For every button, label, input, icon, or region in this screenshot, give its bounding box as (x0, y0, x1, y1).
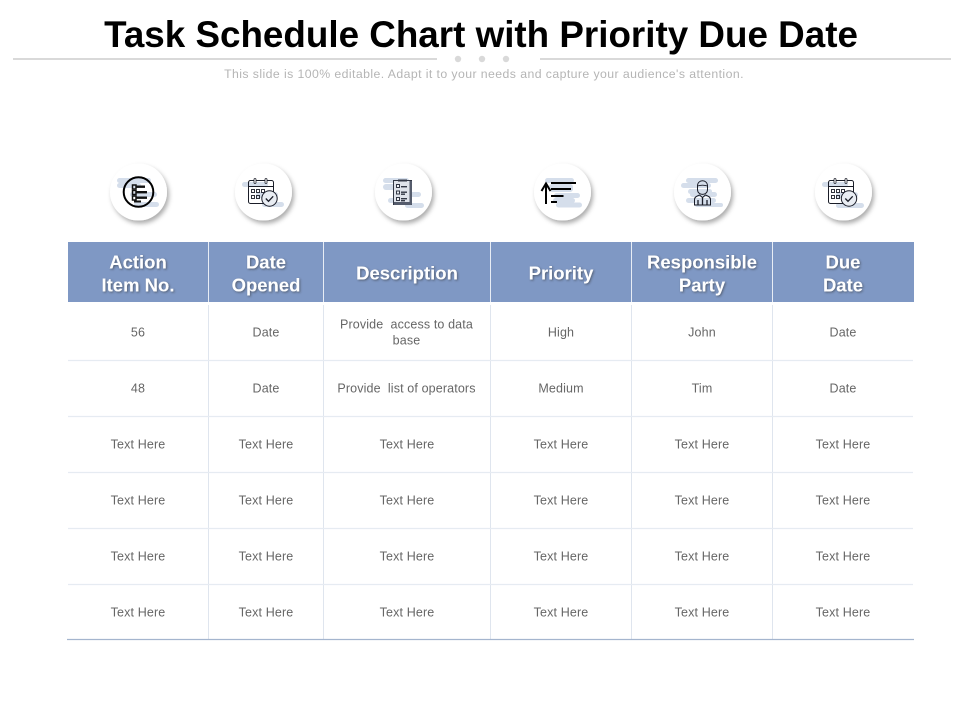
icon: checklist clipboard (description) (375, 164, 432, 220)
row 4: Text Here (675, 494, 729, 508)
row 2: Date (253, 382, 279, 396)
row 6: Text Here (816, 606, 870, 620)
table header row: Party (679, 274, 726, 296)
row 1 (131, 318, 856, 348)
icon: businessman (responsible party) (674, 164, 731, 220)
row 2: Medium (538, 382, 584, 396)
row 5: Text Here (111, 550, 165, 564)
table header row: Date (246, 252, 286, 272)
row 5 (111, 550, 870, 564)
icon: priority sort arrow (534, 164, 591, 220)
table header row: Opened (232, 274, 300, 296)
title divider with dots (13, 56, 951, 62)
row 6: Text Here (534, 606, 588, 620)
table header row: Action (109, 252, 167, 272)
table (67, 242, 914, 640)
row 3 (111, 438, 870, 452)
row 3: Text Here (534, 438, 588, 452)
table header row: Priority (529, 262, 594, 284)
table header row: Description (356, 262, 458, 284)
row 4 (111, 494, 870, 508)
table header row: Responsible (647, 252, 757, 272)
row 2: Date (830, 382, 856, 396)
row 4: Text Here (239, 494, 293, 508)
row 6: Text Here (675, 606, 729, 620)
row 5: Text Here (675, 550, 729, 564)
table header row: Due (826, 252, 860, 272)
row 3: Text Here (816, 438, 870, 452)
row 1: High (548, 326, 574, 340)
row 5: Text Here (534, 550, 588, 564)
table header row (68, 242, 914, 302)
row 3: Text Here (239, 438, 293, 452)
subtitle: This slide is 100% editable. Adapt it to your needs and capture your audience's attention. (224, 67, 744, 81)
row 5: Text Here (239, 550, 293, 564)
row 1: Date (830, 326, 856, 340)
row 4: Text Here (380, 494, 434, 508)
table header row: Item No. (102, 274, 174, 296)
title: Task Schedule Chart with Priority Due Date (104, 14, 858, 55)
row 1: Date (253, 326, 279, 340)
row 3: Text Here (111, 438, 165, 452)
row 2 (131, 382, 856, 396)
row 1: John (688, 326, 716, 340)
row 1: Provide access to data (340, 318, 473, 332)
icon: calendar with check (due date) (815, 164, 872, 220)
row 3: Text Here (380, 438, 434, 452)
row 4: Text Here (816, 494, 870, 508)
row 6: Text Here (239, 606, 293, 620)
row 1: base (393, 334, 420, 348)
row 5: Text Here (816, 550, 870, 564)
row 6 (111, 606, 870, 620)
table header row: Date (823, 274, 863, 296)
row 4: Text Here (534, 494, 588, 508)
row 2: Provide list of operators (337, 382, 476, 396)
row 3: Text Here (675, 438, 729, 452)
row 1: 56 (131, 326, 145, 340)
row 6: Text Here (111, 606, 165, 620)
row 6: Text Here (380, 606, 434, 620)
icon: action item list (110, 164, 167, 220)
row 5: Text Here (380, 550, 434, 564)
row 4: Text Here (111, 494, 165, 508)
row 2: Tim (692, 382, 712, 396)
icon: calendar with check (date opened) (235, 164, 292, 220)
row 2: 48 (131, 382, 145, 396)
